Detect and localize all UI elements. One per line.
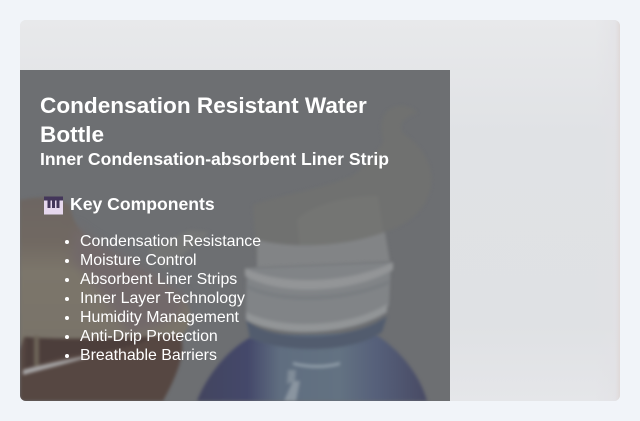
bottle neck [246,316,387,349]
hand [20,198,190,401]
list: key components [65,233,261,364]
bottle body [197,334,427,401]
spout and flip lid [253,106,431,268]
icon: piano keys [44,196,63,214]
panel: dark text overlay [20,70,450,401]
screw cap [245,262,393,332]
list: key components: Inner Layer Technology [80,290,245,307]
list: key components: Condensation Resistance [80,233,261,250]
list: key components: Absorbent Liner Strips [80,271,237,288]
list: key components: Breathable Barriers [80,347,217,364]
heading: key components: Key Components [70,194,215,214]
title: Condensation Resistant Water Bottle [40,93,367,147]
list: key components: Moisture Control [80,252,197,269]
finger in background [148,230,210,270]
list: key components: Humidity Management [80,309,239,326]
list: key components: Anti-Drip Protection [80,328,218,345]
subtitle: Inner Condensation-absorbent Liner Strip [40,149,389,169]
photo: hand holding water bottle, seen through overlay [20,198,428,401]
